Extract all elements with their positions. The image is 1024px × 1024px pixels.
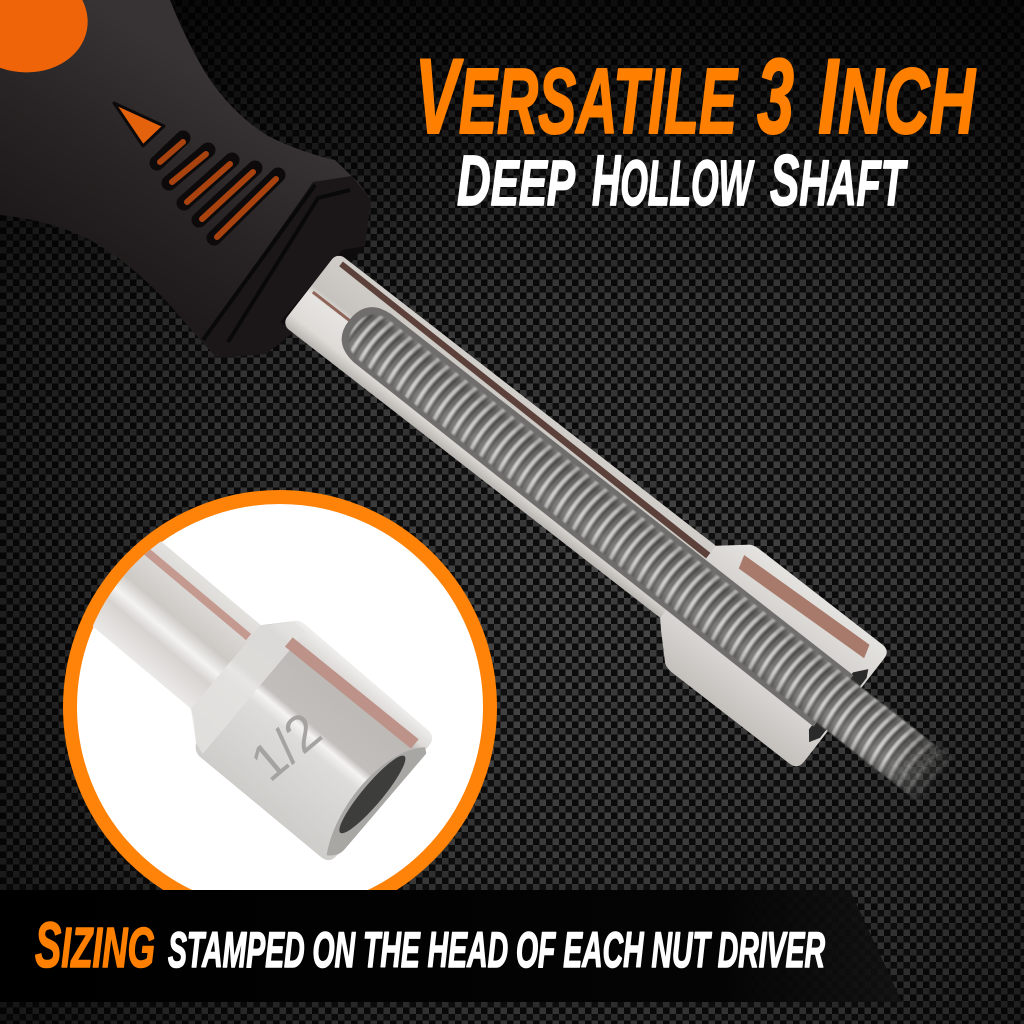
banner text: SIZING bbox=[35, 909, 155, 981]
bottom banner bbox=[0, 890, 902, 1002]
inset circle: size stamp close-up bbox=[63, 490, 497, 890]
close-up socket bbox=[92, 541, 432, 860]
subtitle: SHAFT bbox=[770, 142, 908, 221]
handle collar bbox=[203, 176, 371, 358]
collar mouth bbox=[280, 246, 365, 332]
icon: nut driver shaft with threaded rod bbox=[285, 256, 951, 801]
shaft bbox=[282, 252, 721, 622]
vent slots bbox=[157, 138, 278, 238]
orange ring and white disc bbox=[70, 497, 490, 917]
orange triangle window bbox=[114, 103, 164, 146]
close-up socket stripe bbox=[285, 635, 419, 751]
thread channel band bbox=[327, 296, 855, 727]
title: VERSATILE bbox=[415, 36, 739, 156]
handle grip body bbox=[0, 0, 371, 357]
chamfer ring bbox=[191, 624, 292, 754]
subtitle: DEEP bbox=[457, 142, 575, 221]
banner text bbox=[35, 909, 825, 981]
hex bore inner bbox=[339, 756, 406, 834]
bore chamfer bbox=[326, 747, 426, 856]
title: 3 bbox=[757, 36, 794, 156]
subtitle bbox=[457, 142, 908, 221]
close-up socket body bbox=[191, 620, 432, 860]
threaded rod bbox=[336, 306, 960, 808]
shaft thin stripe bbox=[312, 291, 355, 325]
socket bore bbox=[803, 663, 871, 746]
collar groove bbox=[203, 185, 350, 342]
socket head bbox=[638, 527, 890, 770]
close-up shaft bbox=[92, 541, 261, 708]
banner background bbox=[0, 890, 902, 1002]
orange grip insert bbox=[0, 0, 96, 83]
subtitle: HOLLOW bbox=[592, 142, 755, 221]
socket pink stripe bbox=[736, 550, 873, 663]
close-up shaft stripe bbox=[144, 550, 251, 640]
icon: screwdriver handle bbox=[0, 0, 371, 358]
shaft dark reflection bbox=[336, 261, 715, 560]
stamped size: 1/2 bbox=[240, 702, 333, 793]
